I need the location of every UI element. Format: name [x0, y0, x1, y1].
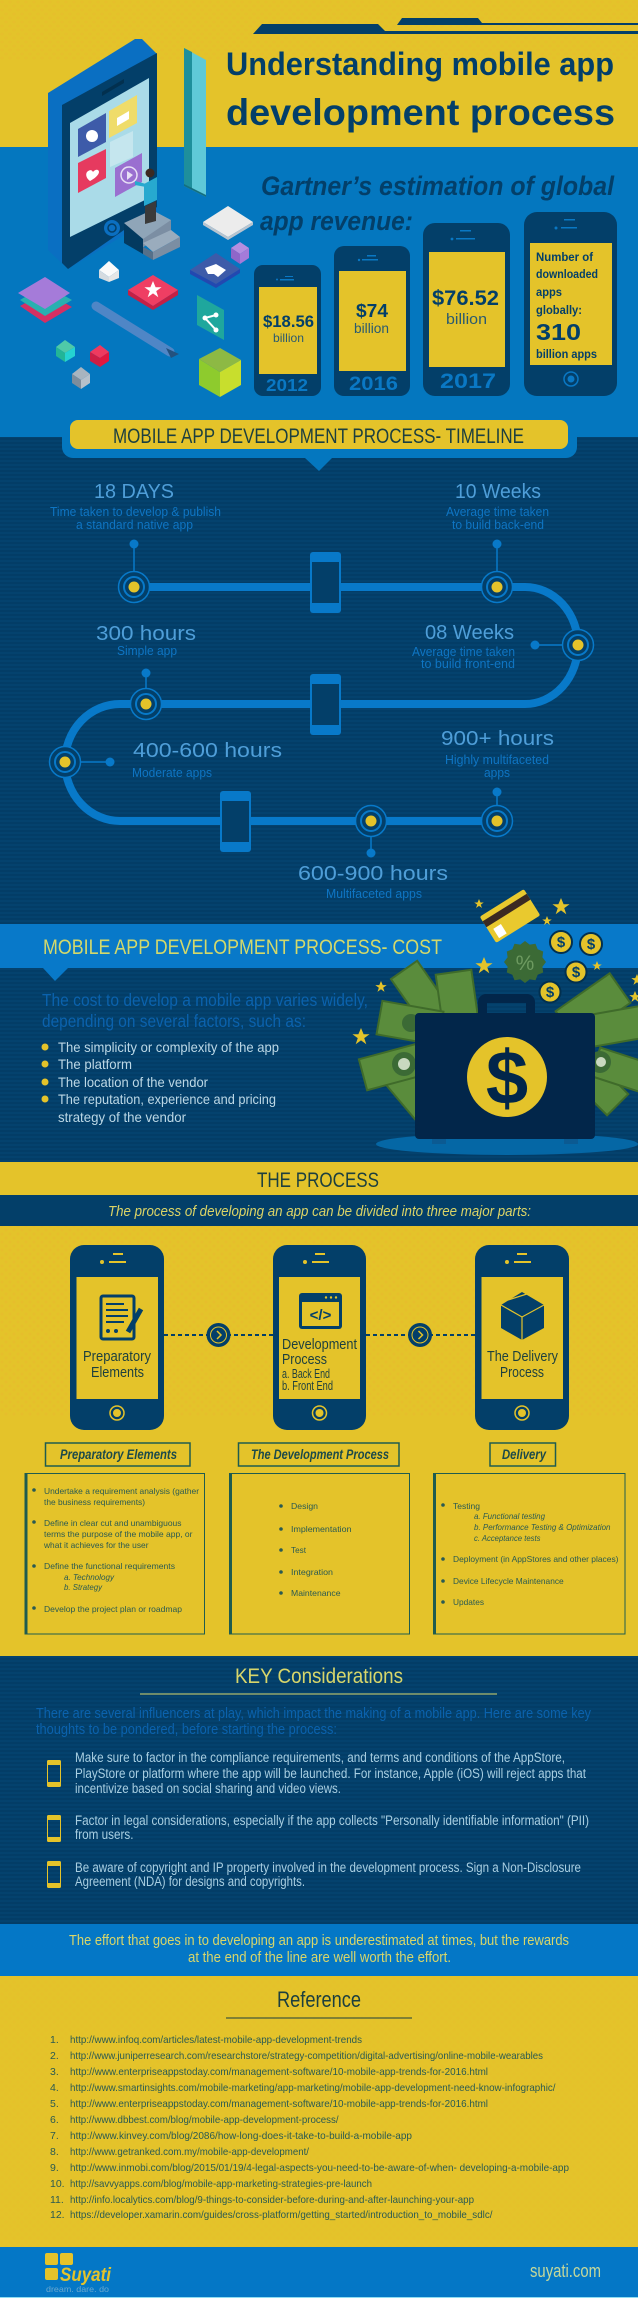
phone 2017: $76.52 — [432, 286, 499, 310]
ruler — [184, 48, 206, 197]
key point 1: incentivize based on social sharing and video views. — [75, 1781, 341, 1796]
panel: development list — [229, 1473, 410, 1634]
cost factors list: strategy of the vendor — [58, 1109, 186, 1125]
phone 2017: 2017 — [440, 369, 496, 393]
cost intro: The cost to develop a mobile app varies widely, — [42, 990, 368, 1010]
cost factors list: The platform — [58, 1056, 132, 1072]
panel: delivery list: a. Functional testing — [474, 1511, 545, 1521]
reference heading: Reference — [277, 1987, 361, 2012]
illustration: isometric phone and app blocks — [18, 39, 253, 397]
cost intro — [42, 990, 368, 1031]
heading box: development process — [238, 1443, 399, 1466]
reference list: 5. — [50, 2098, 59, 2110]
purple cube — [231, 242, 249, 264]
stars — [352, 898, 638, 1044]
phone: downloaded apps: downloaded — [536, 269, 598, 281]
title — [226, 46, 615, 133]
phone: development process — [273, 1245, 366, 1430]
panel: delivery list: Updates — [453, 1597, 484, 1607]
reference list: http://www.infoq.com/articles/latest-mobile-app-development-trends — [70, 2034, 362, 2046]
label: 400-600 hours — [132, 740, 282, 780]
phone: downloaded apps: billion apps — [536, 349, 597, 361]
panel: delivery list: Deployment (in AppStores and other places) — [453, 1554, 619, 1564]
green cube — [199, 348, 241, 397]
phone: preparatory elements — [70, 1245, 164, 1430]
panel: delivery list: Device Lifecycle Maintenance — [453, 1576, 564, 1586]
reference list: 3. — [50, 2066, 59, 2078]
phone 2016: 2016 — [349, 373, 398, 395]
key point 2: from users. — [75, 1827, 134, 1842]
phone 2016 — [334, 246, 410, 396]
panel: preparatory list: Define in clear cut and unambiguous — [44, 1518, 182, 1528]
phone: delivery process: Process — [500, 1364, 544, 1381]
reference list: http://www.enterpriseappstoday.com/management-software/10-mobile-app-trends-for-2016.html — [70, 2066, 488, 2078]
phone: downloaded apps: Number of — [536, 252, 593, 264]
phone: downloaded apps: 310 — [536, 319, 581, 345]
label: 08 weeks — [412, 622, 515, 671]
phone: development process: a. Back End — [282, 1367, 330, 1381]
label: 10 weeks: 10 Weeks — [455, 481, 541, 503]
person on steps — [124, 168, 180, 260]
process subtitle: The process of developing an app can be divided into three major parts: — [108, 1203, 531, 1220]
phone: development process: Development — [282, 1336, 358, 1353]
label: 18 days — [50, 481, 221, 532]
panel: preparatory list: Undertake a requirement analysis (gather — [44, 1486, 199, 1496]
phone: preparatory elements: Preparatory — [83, 1348, 151, 1365]
percent badge: % — [516, 952, 534, 975]
label: 600-900 hours: Multifaceted apps — [326, 886, 422, 901]
timeline heading tab: MOBILE APP DEVELOPMENT PROCESS- TIMELINE — [113, 425, 524, 448]
panel: preparatory list: Develop the project plan or roadmap — [44, 1604, 182, 1614]
phone: development process: Process — [282, 1351, 327, 1368]
label: 300 hours: 300 hours — [96, 623, 196, 645]
app tiles on phone — [78, 95, 142, 197]
icon: document and pen — [101, 1296, 141, 1339]
small grey cube — [72, 367, 90, 389]
panel: preparatory list: b. Strategy — [64, 1582, 103, 1592]
label: 400-600 hours: Moderate apps — [132, 765, 212, 780]
label: 18 days: a standard native app — [76, 517, 193, 532]
label: 900+ hours: 900+ hours — [441, 728, 554, 750]
phone 2016: billion — [354, 321, 389, 336]
phone: delivery process: The Delivery — [487, 1348, 558, 1365]
key considerations heading: KEY Considerations — [235, 1665, 403, 1688]
panel: preparatory list: terms the purpose of the mobile app, or — [44, 1529, 193, 1539]
label: 18 days: 18 DAYS — [94, 481, 174, 503]
key point 3: Agreement (NDA) for designs and copyrights. — [75, 1874, 305, 1889]
banknotes — [359, 961, 638, 1123]
phone 2012: billion — [273, 331, 304, 345]
reference list — [50, 2034, 569, 2221]
small red cube — [90, 345, 109, 367]
small teal cube — [56, 340, 75, 362]
cost heading: MOBILE APP DEVELOPMENT PROCESS- COST — [43, 936, 442, 959]
key considerations intro — [36, 1706, 592, 1738]
phone 2016: $74 — [356, 300, 389, 321]
star tile — [128, 275, 178, 310]
revenue heading — [260, 171, 614, 236]
footer logo: Suyati — [60, 2265, 112, 2286]
purple book stack — [18, 277, 72, 323]
panel: development list: Test — [291, 1545, 307, 1555]
pencil — [96, 306, 179, 358]
timeline labels — [50, 481, 554, 901]
panel: delivery list: c. Acceptance tests — [474, 1533, 541, 1543]
key considerations intro: thoughts to be pondered, before starting the process: — [36, 1722, 337, 1738]
footer logo: dream. dare. do — [46, 2284, 109, 2294]
icon: package box — [501, 1292, 544, 1340]
label: 08 weeks: 08 Weeks — [425, 622, 514, 644]
phone 2012: 2012 — [266, 375, 308, 395]
phone: downloaded apps — [524, 212, 617, 396]
reference list: http://www.getranked.com.my/mobile-app-development/ — [70, 2146, 309, 2158]
reference list: 9. — [50, 2162, 59, 2174]
reference list: 2. — [50, 2050, 59, 2062]
white tile — [203, 206, 253, 240]
label: 10 weeks: to build back-end — [452, 517, 544, 532]
revenue heading: Gartner’s estimation of global — [261, 171, 614, 201]
phone 2012: $18.56 — [263, 313, 314, 331]
illustration: money briefcase — [352, 889, 638, 1155]
shadow — [376, 1133, 638, 1155]
illustration: money briefcase: $ — [557, 934, 566, 951]
cost intro: depending on several factors, such as: — [42, 1011, 306, 1031]
key point 2 — [47, 1813, 589, 1842]
case — [478, 994, 535, 1014]
message tile — [190, 253, 240, 288]
phone: delivery process — [475, 1245, 569, 1430]
reference list: http://info.localytics.com/blog/9-things-to-consider-before-during-and-after-launching-your-app — [70, 2194, 474, 2206]
reference list: http://www.inmobi.com/blog/2015/01/19/4-legal-aspects-you-need-to-be-aware-of-when- developing-a-mobile-app — [70, 2162, 569, 2174]
phone: preparatory elements: Elements — [91, 1364, 144, 1381]
timeline phone icons — [220, 552, 341, 852]
reference list: http://www.dbbest.com/blog/mobile-app-development-process/ — [70, 2114, 339, 2126]
phone: downloaded apps: globally: — [536, 305, 582, 317]
cost factors list: The reputation, experience and pricing — [58, 1091, 276, 1107]
panel: delivery list — [433, 1473, 625, 1634]
phone 2017 — [423, 223, 510, 396]
heading box: delivery: Delivery — [502, 1447, 547, 1462]
share tile — [197, 295, 224, 340]
cost factors list — [42, 1039, 279, 1125]
title: Understanding mobile app — [226, 46, 614, 82]
key point 1: Make sure to factor in the compliance requirements, and terms and conditions of the AppStore, — [75, 1750, 565, 1765]
illustration: money briefcase: $ — [546, 984, 555, 1001]
panel: development list: Maintenance — [291, 1588, 341, 1598]
cost heading — [43, 936, 442, 981]
panel: development list: Integration — [291, 1567, 333, 1577]
reference list: http://savvyapps.com/blog/mobile-app-marketing-strategies-pre-launch — [70, 2178, 372, 2190]
panel: preparatory list: Define the functional requirements — [44, 1561, 175, 1571]
phone 2012 — [254, 265, 321, 396]
panel: delivery list: Testing — [453, 1501, 480, 1511]
the process heading: THE PROCESS — [257, 1169, 379, 1192]
closing statement: at the end of the line are well worth the effort. — [188, 1950, 451, 1966]
title: development process — [226, 92, 615, 133]
icon: code window: </> — [310, 1307, 332, 1324]
heading box: development process: The Development Process — [251, 1447, 389, 1462]
label: 08 weeks: Average time taken — [412, 644, 515, 659]
revenue heading: app revenue: — [260, 206, 413, 236]
footer website: suyati.com — [530, 2261, 601, 2281]
label: 600-900 hours — [298, 863, 448, 901]
panel: development list: Design — [291, 1501, 318, 1511]
label: 10 weeks — [446, 481, 549, 532]
label: 900+ hours: Highly multifaceted — [445, 752, 549, 767]
heading box: preparatory elements: Preparatory Elements — [60, 1447, 177, 1462]
label: 900+ hours — [441, 728, 554, 780]
cost factors list: The simplicity or complexity of the app — [58, 1039, 279, 1055]
panel: preparatory list: what it achieves for the user — [43, 1540, 149, 1550]
icon: code window — [299, 1293, 342, 1329]
reference list: http://www.juniperresearch.com/researchstore/strategy-competition/digital-advertising/online-mobile-wearables — [70, 2050, 543, 2062]
reference list: 11. — [50, 2194, 64, 2206]
reference list: 1. — [50, 2034, 59, 2046]
icon: phone — [47, 1861, 61, 1888]
phone: development process: b. Front End — [282, 1379, 333, 1393]
closing statement — [69, 1933, 569, 1966]
white cube — [99, 261, 119, 282]
icon: phone — [47, 1760, 61, 1787]
coins — [540, 931, 602, 1002]
percent badge — [504, 941, 546, 983]
key point 1 — [47, 1750, 586, 1796]
panel: preparatory list: the business requirements) — [44, 1497, 145, 1507]
phone 2017: billion — [446, 312, 487, 328]
reference list: http://www.kinvey.com/blog/2086/how-long-does-it-take-to-build-a-mobile-app — [70, 2130, 412, 2142]
reference list: https://developer.xamarin.com/guides/cross-platform/getting_started/introduction_to_mobile_sdlc/ — [70, 2209, 493, 2221]
heading box: delivery — [490, 1443, 556, 1466]
key point 3 — [47, 1860, 581, 1889]
label: 900+ hours: apps — [484, 765, 510, 780]
illustration: money briefcase: $ — [587, 936, 596, 953]
label: 08 weeks: to build front-end — [421, 656, 515, 671]
card — [480, 889, 540, 943]
reference list: 7. — [50, 2130, 59, 2142]
label: 600-900 hours: 600-900 hours — [298, 863, 448, 885]
timeline heading tab — [62, 420, 577, 471]
panel: development list: Implementation — [291, 1524, 352, 1534]
label: 300 hours: Simple app — [117, 643, 177, 658]
reference list: http://www.enterpriseappstoday.com/management-software/10-mobile-app-trends-for-2016.html — [70, 2098, 488, 2110]
label: 18 days: Time taken to develop & publish — [50, 504, 221, 519]
reference list: 12. — [50, 2209, 65, 2221]
footer logo — [45, 2253, 112, 2294]
timeline nodes — [50, 572, 594, 836]
panel: delivery list: b. Performance Testing & Optimization — [474, 1522, 611, 1532]
panel: preparatory list — [24, 1473, 204, 1634]
reference list: 10. — [50, 2178, 65, 2190]
header accent bars — [253, 18, 638, 34]
reference list: 8. — [50, 2146, 59, 2158]
big phone — [48, 39, 157, 269]
closing statement: The effort that goes in to developing an app is underestimated at times, but the rewards — [69, 1933, 569, 1949]
panel: preparatory list: a. Technology — [64, 1572, 115, 1582]
reference list: http://www.smartinsights.com/mobile-marketing/app-marketing/mobile-app-development-need-know-infographic/ — [70, 2082, 556, 2094]
phone: downloaded apps: apps — [536, 287, 562, 299]
heading box: preparatory elements — [46, 1443, 190, 1466]
icon: phone — [47, 1815, 61, 1842]
illustration: money briefcase: $ — [572, 964, 581, 981]
process connectors — [164, 1323, 475, 1347]
label: 10 weeks: Average time taken — [446, 504, 549, 519]
label: 300 hours — [96, 623, 196, 658]
timeline path — [65, 540, 578, 858]
cost factors list: The location of the vendor — [58, 1074, 208, 1090]
reference list: 4. — [50, 2082, 59, 2094]
reference list: 6. — [50, 2114, 59, 2126]
illustration: money briefcase: $ — [486, 1036, 528, 1121]
label: 400-600 hours: 400-600 hours — [133, 740, 282, 762]
